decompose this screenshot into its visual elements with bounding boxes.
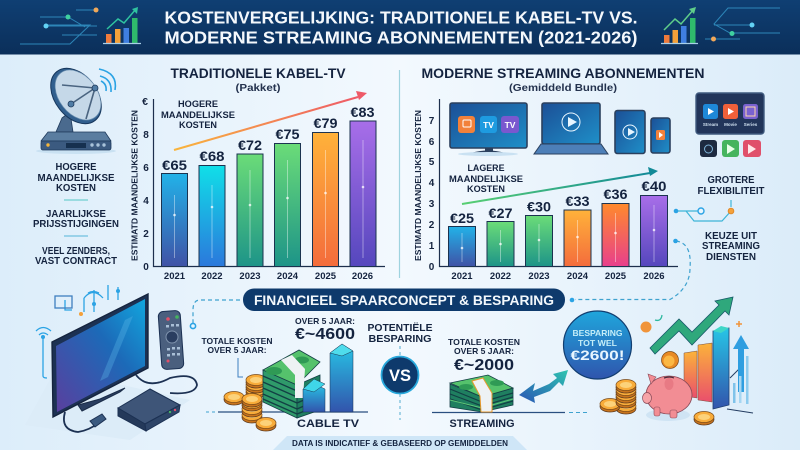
text: cable total costs label: TOTALE KOSTEN (202, 336, 272, 346)
heading: streaming (422, 65, 704, 94)
arrow: modest cost trend (462, 167, 658, 204)
text: streaming choice: DIENSTEN (706, 251, 756, 263)
callout: lower monthly costs: LAGERE (468, 163, 504, 173)
y axis: 4 (429, 178, 435, 189)
year labels: 2021 (164, 271, 186, 282)
bar values: €25 (450, 210, 474, 226)
icon: television with apps: TV (483, 120, 494, 130)
icon: circuit and growth chart left (20, 7, 141, 44)
label: streaming: STREAMING (450, 418, 514, 430)
bars (162, 121, 376, 266)
badge: savings: BESPARING (572, 328, 623, 338)
callout: higher monthly costs: KOSTEN (179, 120, 217, 130)
badge: savings: €2600! (570, 347, 624, 363)
year labels: 2025 (315, 271, 337, 282)
text: streaming total costs: OVER 5 JAAR: (454, 346, 514, 356)
panel: traditional cable TV (33, 59, 385, 282)
y axis: 0 (429, 262, 435, 273)
y axis: 1 (429, 241, 435, 252)
title: KOSTENVERGELIJKING: TRADITIONELE KABEL-TV VS. (164, 8, 638, 28)
bar chart: streaming (413, 99, 678, 282)
text: flexibility: GROTERE (708, 174, 754, 186)
year labels: 2026 (643, 271, 665, 282)
text: streaming choice: KEUZE UIT (705, 230, 758, 242)
panel: streaming apps: Series (744, 122, 758, 127)
panel: financial savings (25, 285, 753, 440)
callout: lower monthly costs: KOSTEN (467, 184, 505, 194)
year labels: 2026 (352, 271, 373, 282)
bar values: €72 (238, 137, 262, 153)
y axis: 4 (143, 196, 149, 207)
year labels (164, 271, 373, 282)
y axis: 8 (143, 130, 149, 141)
y axis: ESTIMATD MAANDELIJKSE KOSTEN (413, 110, 423, 261)
text: flexibility (698, 174, 765, 197)
arrow: double arrow to savings (519, 370, 568, 403)
bars (448, 196, 668, 266)
bar values: €68 (200, 148, 225, 164)
text: cable total costs label: OVER 5 JAAR: (208, 345, 267, 355)
y axis: € (142, 96, 148, 108)
text: cable drawbacks: MAANDELIJKSE (38, 172, 114, 184)
text: potential savings: BESPARING (368, 333, 432, 345)
icon: laptop (534, 103, 608, 154)
text: cable drawbacks: VEEL ZENDERS, (42, 245, 110, 257)
y axis: 2 (143, 229, 149, 240)
connector: flexibility to choice (674, 200, 734, 221)
badge: VS: VS (389, 367, 411, 385)
text: streaming choice: STREAMING (702, 240, 760, 252)
footer note: DATA IS INDICATIEF & GEBASEERD OP GEMIDDELDEN (292, 439, 508, 448)
icon: television with apps: TV (505, 120, 516, 130)
bar values: €40 (642, 178, 667, 194)
y axis: ESTIMATD MAANDELIJKSE KOSTEN (130, 110, 140, 261)
arrow: rising cost (174, 91, 367, 150)
y axis: 2 (429, 220, 435, 231)
badge: savings (564, 311, 632, 379)
text: potential savings: POTENTIËLE (368, 321, 432, 334)
icon: television with apps (450, 103, 527, 156)
icon: remote (158, 310, 184, 370)
heading: cable TV: TRADITIONELE KABEL-TV (170, 65, 346, 81)
badge: VS (382, 356, 418, 394)
bar values: €75 (276, 126, 300, 142)
panel: modern streaming (413, 65, 765, 302)
y axis: 7 (429, 116, 435, 127)
text: cable drawbacks: HOGERE (56, 161, 96, 173)
callout: higher monthly costs: HOGERE (178, 99, 218, 109)
callout: lower monthly costs: MAANDELIJKSE (449, 174, 523, 184)
year labels: 2021 (451, 271, 473, 282)
icon: satellite dish and receiver (36, 59, 116, 154)
icon: streaming money (432, 375, 588, 412)
text: streaming choice (702, 230, 760, 263)
year labels: 2023 (528, 271, 550, 282)
text: streaming total costs: €~2000 (454, 357, 514, 374)
callout: lower monthly costs (449, 163, 523, 194)
bar values: €27 (488, 205, 513, 221)
year labels: 2025 (605, 271, 627, 282)
connector: left dashed link (190, 300, 240, 329)
panel: streaming apps: Movie (724, 122, 737, 127)
text: cable total costs label (202, 336, 272, 355)
bar chart: cable TV (130, 91, 385, 282)
connector: dashed link to savings (570, 239, 690, 302)
panel: streaming apps (696, 93, 764, 134)
callout: higher monthly costs (161, 99, 235, 130)
year labels: 2022 (201, 271, 223, 282)
bar values: €79 (314, 115, 338, 131)
icon: cable money and coins (206, 350, 368, 431)
icon: app tiles (700, 140, 761, 157)
icon: phone (651, 118, 670, 153)
icon: cable cost bars (303, 344, 353, 412)
text: streaming total costs: TOTALE KOSTEN (448, 337, 520, 347)
bar values: €30 (527, 198, 551, 214)
text: streaming total costs (448, 337, 520, 374)
heading pill (243, 288, 565, 311)
heading: cable TV (170, 65, 346, 94)
y axis: 3 (429, 199, 435, 210)
y axis (413, 99, 678, 273)
text: potential savings (368, 321, 432, 345)
title: MODERNE STREAMING ABONNEMENTEN (2021-2026) (164, 28, 638, 48)
bar values (450, 178, 667, 226)
year labels: 2024 (567, 271, 589, 282)
heading: streaming: (Gemiddeld Bundle) (509, 83, 617, 94)
text: cable drawbacks: VAST CONTRACT (35, 255, 118, 267)
bar values: €36 (604, 186, 628, 202)
year labels: 2024 (277, 271, 299, 282)
callout: higher monthly costs: MAANDELIJKSE (161, 110, 235, 120)
text: cable drawbacks (33, 161, 119, 267)
icon: growth chart and circuit right (661, 7, 780, 44)
text: flexibility: FLEXIBILITEIT (698, 185, 765, 197)
badge: savings: TOT WEL (578, 338, 617, 348)
year labels (451, 271, 665, 282)
y axis (130, 96, 385, 273)
heading: streaming: MODERNE STREAMING ABONNEMENTEN (422, 65, 704, 81)
icon: tablet (615, 110, 645, 154)
text: cable drawbacks: KOSTEN (56, 182, 96, 194)
bar values: €83 (350, 104, 375, 120)
text: cable drawbacks: PRIJSSTIJGINGEN (33, 218, 119, 230)
bar values (162, 104, 375, 173)
panel: streaming apps: Stream (703, 122, 718, 127)
heading: cable TV: (Pakket) (236, 83, 280, 94)
y axis: 6 (429, 137, 435, 148)
text: cable total amount: €~4600 (295, 326, 355, 343)
y axis: 6 (143, 163, 149, 174)
text: cable total amount (295, 316, 355, 343)
bar values: €33 (566, 193, 590, 209)
label: cable TV: CABLE TV (297, 418, 360, 430)
footer note (273, 436, 527, 450)
y axis: 5 (429, 157, 435, 168)
heading pill: FINANCIEEL SPAARCONCEPT & BESPARING (254, 293, 554, 308)
title (164, 8, 638, 48)
header banner (0, 0, 800, 54)
y axis: 0 (143, 262, 149, 273)
text: cable total amount: OVER 5 JAAR: (295, 316, 355, 326)
text: cable drawbacks: JAARLIJKSE (46, 208, 106, 220)
icon: piggy bank, coins and growth (600, 297, 753, 425)
year labels: 2022 (490, 271, 511, 282)
year labels: 2023 (239, 271, 261, 282)
icon: set-top box (118, 389, 180, 431)
icon: television and receiver (25, 285, 197, 440)
bar values: €65 (162, 157, 187, 173)
